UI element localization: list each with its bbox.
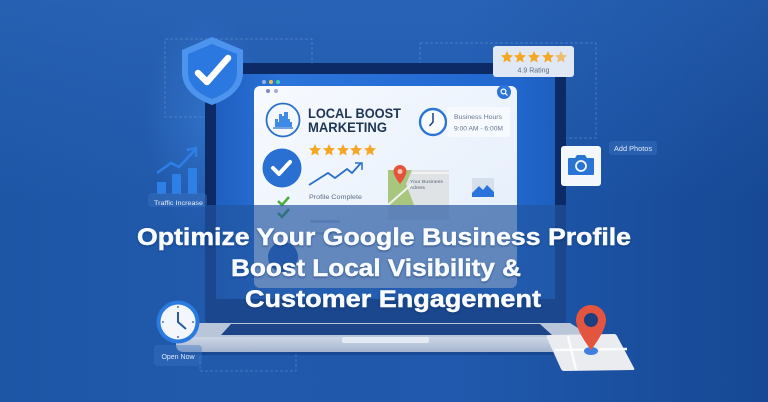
- business hours: Business Hours: [454, 114, 503, 121]
- profile complete: Profile Complete: [309, 194, 362, 201]
- traffic chart: [148, 148, 207, 207]
- laptop: [205, 63, 566, 323]
- bars: [157, 168, 197, 194]
- image icon: [472, 178, 494, 197]
- company name: MARKETING: [308, 120, 387, 135]
- mini map: [388, 165, 449, 220]
- map with location pin: [547, 305, 634, 371]
- base shadow: [180, 350, 580, 355]
- open now clock: [156, 300, 200, 344]
- open now label: Open Now: [161, 354, 195, 361]
- laptop base: [176, 323, 592, 355]
- business hours: 9:00 AM - 6:00M: [454, 126, 503, 132]
- search button: [497, 85, 511, 99]
- browser panel: [254, 86, 517, 288]
- map tile: [547, 334, 634, 371]
- dashed frames: [165, 39, 596, 371]
- base front: [176, 337, 592, 352]
- keyboard: [221, 324, 552, 335]
- clock icon: [420, 109, 446, 135]
- laptop screen: [216, 74, 555, 299]
- rating stars: [309, 144, 376, 156]
- window dots: [262, 80, 280, 84]
- trend line: [309, 163, 362, 185]
- company name: LOCAL BOOST: [308, 106, 402, 121]
- pin shadow: [584, 347, 598, 355]
- trackpad notch: [342, 337, 429, 343]
- add photos label: [609, 141, 657, 155]
- growth arrow: [157, 148, 196, 173]
- title: Boost Local Visibility &: [231, 255, 521, 282]
- laptop lid: [205, 63, 566, 323]
- check badge: [262, 148, 302, 188]
- mini map: Adress: [410, 185, 426, 191]
- title: [137, 224, 631, 313]
- company name: [308, 106, 402, 135]
- faded lower content: [268, 220, 340, 272]
- traffic label: Traffic Increase: [154, 200, 203, 207]
- card stars: [501, 51, 567, 62]
- business hours: [447, 107, 510, 137]
- rating text: 4.9 Rating: [518, 68, 550, 74]
- add photos label: Add Photos: [614, 146, 653, 153]
- base deck: [176, 323, 592, 337]
- location pin: [576, 305, 606, 350]
- security shield: [182, 37, 243, 105]
- panel controls: [266, 89, 278, 93]
- title: Customer Engagement: [245, 286, 541, 313]
- title: Optimize Your Google Business Profile: [137, 224, 631, 251]
- map roads: [555, 336, 627, 370]
- overlay band: [205, 205, 566, 323]
- mini map: Your Business: [410, 179, 444, 185]
- green checks: [278, 197, 289, 217]
- rating card: [493, 46, 574, 77]
- camera card: [561, 146, 601, 186]
- logo icon: [266, 104, 300, 136]
- open now label: [154, 345, 202, 366]
